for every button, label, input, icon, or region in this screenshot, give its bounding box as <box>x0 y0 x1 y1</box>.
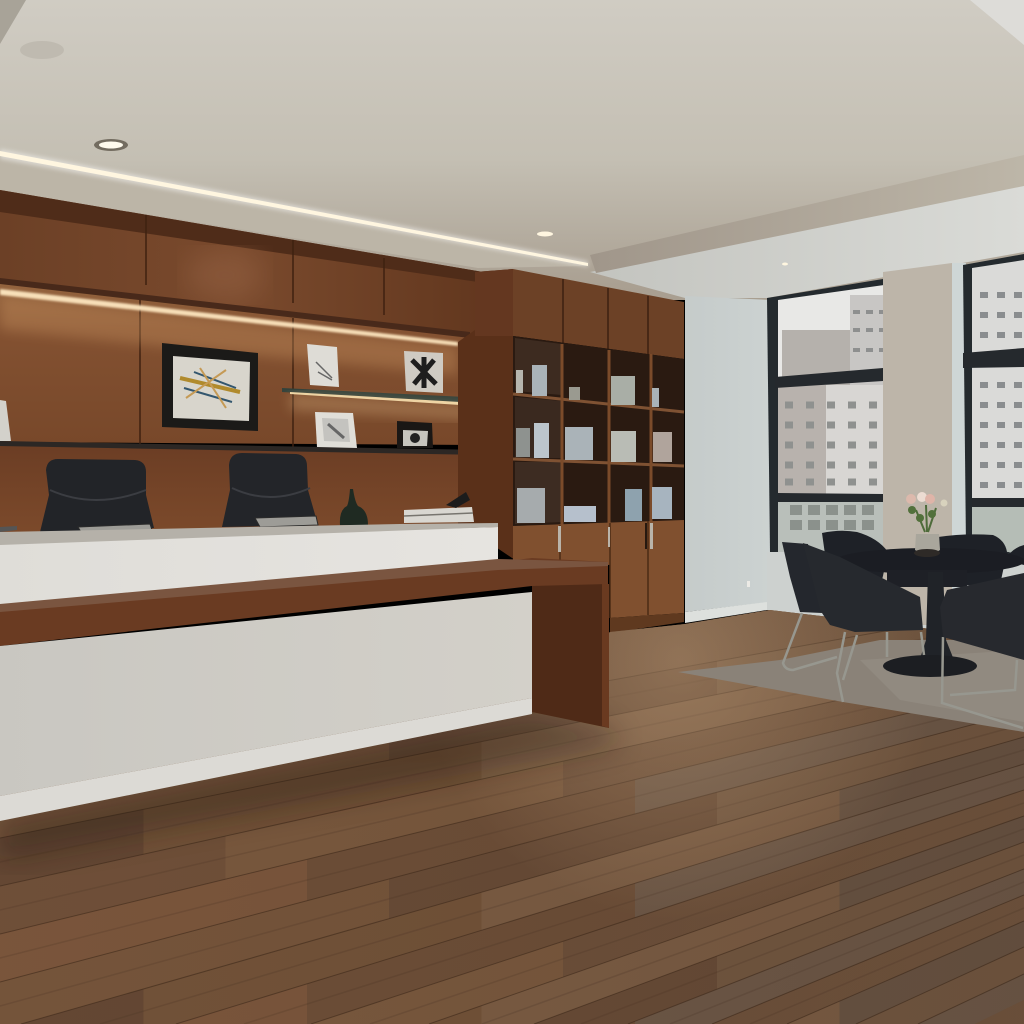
chrome legs <box>783 613 1023 728</box>
front chair <box>803 543 923 632</box>
reception desk <box>0 523 609 821</box>
desk white upper block <box>0 527 498 608</box>
ceiling beam <box>590 155 1024 273</box>
LED ceiling strip <box>0 149 588 267</box>
floating shelf with frames <box>0 344 486 448</box>
desk white lower front <box>0 592 532 796</box>
left chair <box>782 542 822 613</box>
right lower ceiling <box>590 185 1024 298</box>
wood wall panelling <box>0 190 485 535</box>
area rug <box>678 640 1024 732</box>
back wall <box>685 296 1024 640</box>
central column <box>883 263 966 625</box>
desk wood counter <box>0 558 608 646</box>
lower cabinet doors <box>513 520 684 633</box>
vase with flowers <box>906 492 948 557</box>
window left <box>767 279 884 555</box>
wood floor planks <box>0 610 1024 1024</box>
bookcase <box>458 269 684 633</box>
seated black chairs behind desk <box>40 453 318 532</box>
right chair <box>940 573 1024 660</box>
window right <box>963 254 1024 556</box>
upper cabinet doors <box>513 269 684 359</box>
pedestal <box>918 572 956 665</box>
table top <box>835 548 1024 574</box>
recessed spotlights <box>94 139 788 266</box>
desk accessories <box>0 489 474 537</box>
desk wood leg <box>532 584 609 728</box>
dining table with chairs <box>782 531 1024 728</box>
rear chairs <box>822 531 1024 590</box>
open shelving <box>513 336 684 526</box>
framed wall art <box>162 343 258 431</box>
ceiling <box>0 0 1024 300</box>
